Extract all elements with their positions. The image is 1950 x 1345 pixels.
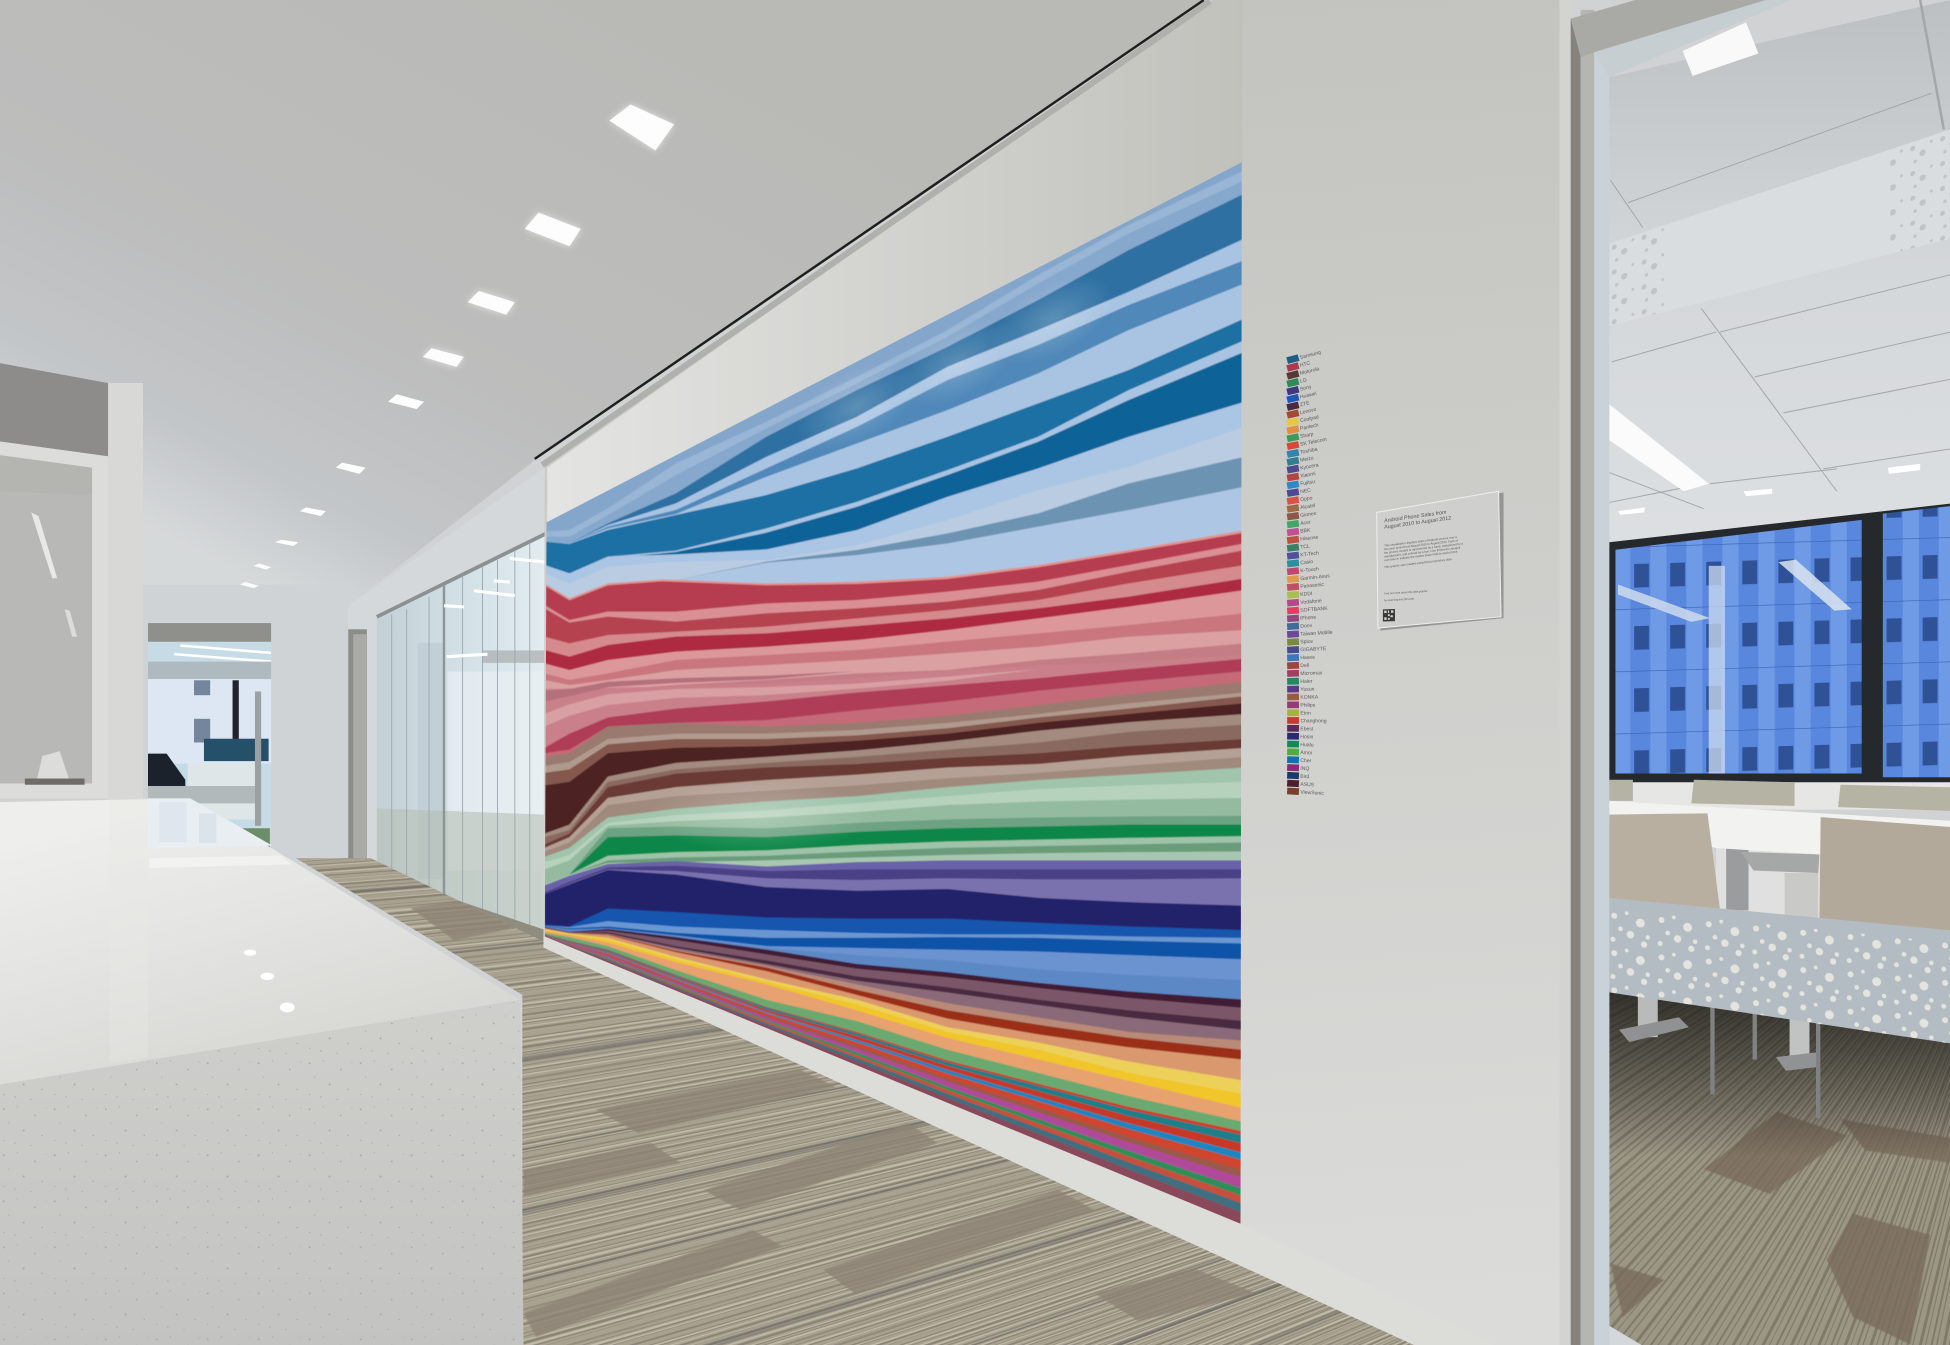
- thin multicoloured bands: smaller manufacturers: [545, 934, 1245, 1226]
- legend: manufacturer colour key: LG: [1299, 377, 1307, 385]
- legend: manufacturer colour key: Xiaomi: [1300, 471, 1316, 480]
- mural: stacked stream graph of Android phone sales: [535, 149, 1250, 1237]
- upper wall band above mural: [547, 0, 1242, 522]
- blue bands: Huawei: [545, 909, 1245, 1001]
- room ceiling: [1609, 0, 1950, 542]
- legend: manufacturer colour key: Toshiba: [1300, 447, 1318, 456]
- brown bands: Motorola: [545, 682, 1245, 859]
- legend: manufacturer colour key: Eton: [1300, 711, 1311, 717]
- legend: manufacturer colour key: HTC: [1299, 360, 1311, 369]
- orange, yellow and tan bands: Lenovo, Coolpad, Pantech: [545, 928, 1245, 1134]
- blue bands: Samsung: [545, 170, 1245, 603]
- purple bands: Sony: [545, 860, 1245, 932]
- legend: manufacturer colour key: Vodafone: [1300, 598, 1322, 606]
- QR code: [1383, 609, 1395, 621]
- table bases and chair legs: [1619, 992, 1818, 1118]
- ceiling lights: [240, 104, 674, 588]
- placard body text: the phones models is represented by a band, categorized by a: [1384, 541, 1463, 555]
- placard title: Android Phone Sales from: [1384, 510, 1447, 524]
- frosted glass band, upper: [1609, 129, 1950, 326]
- left built-in display niche: [0, 363, 108, 798]
- legend: manufacturer colour key: Dell: [1300, 663, 1309, 669]
- far corridor wall: [143, 585, 354, 864]
- legend: manufacturer colour key: Philips: [1300, 703, 1316, 709]
- red and pink bands, lower: [545, 655, 1245, 759]
- ceiling: [0, 0, 1204, 606]
- legend: manufacturer colour key: iPhone: [1300, 615, 1317, 622]
- wall placard: [1377, 491, 1504, 631]
- legend: manufacturer colour key: Coolpad: [1300, 414, 1320, 424]
- legend: manufacturer colour key: Hualu: [1300, 742, 1314, 748]
- legend: manufacturer colour key: Samsung: [1299, 350, 1322, 361]
- legend: manufacturer colour key: Fujitsu: [1300, 479, 1316, 487]
- corridor door: [348, 629, 367, 859]
- legend: manufacturer colour key: Acer: [1300, 519, 1311, 527]
- counter top: [0, 798, 520, 1084]
- legend: manufacturer colour key: INQ: [1300, 766, 1309, 772]
- legend: manufacturer colour key: KDDI: [1300, 591, 1313, 598]
- near chairs: [1609, 813, 1950, 933]
- legend: manufacturer colour key: Sharp: [1300, 431, 1314, 440]
- legend: manufacturer colour key: Amoi: [1300, 750, 1312, 756]
- placard plate: [1377, 491, 1504, 631]
- legend: manufacturer colour key: SOFTBANK: [1300, 606, 1328, 614]
- wall with mural: [543, 0, 1569, 1345]
- counter highlights: [244, 950, 295, 1012]
- far doorway with view into open office: [148, 623, 271, 861]
- placard body text: This visualization displays sales of Android phones over a: [1384, 535, 1457, 548]
- green bands: LG: [545, 768, 1245, 898]
- counter front face: [0, 1000, 524, 1345]
- legend: manufacturer colour key: Meizu: [1300, 455, 1314, 464]
- window wall: [1609, 504, 1950, 785]
- legend: manufacturer colour key: Sony: [1299, 384, 1313, 393]
- red bands: HTC: [545, 530, 1245, 693]
- legend: manufacturer colour key: ViewSonic: [1300, 790, 1324, 797]
- legend: manufacturer colour key: Garmin-Asus: [1300, 573, 1331, 582]
- under-table pillars and wall: [1716, 846, 1822, 920]
- legend: manufacturer colour key: K-Touch: [1300, 566, 1319, 574]
- legend: manufacturer colour key: Casio: [1300, 559, 1314, 566]
- legend: manufacturer colour key: NEC: [1300, 488, 1312, 495]
- legend: manufacturer colour key: Kyocera: [1300, 462, 1319, 472]
- placard body text: over time to indicate the market share held by each phone.: [1384, 549, 1458, 562]
- legend: manufacturer colour key: KT-Tech: [1300, 550, 1319, 559]
- placard QR caption: by scanning this QR code.: [1384, 596, 1415, 602]
- legend: manufacturer colour key: [1286, 348, 1333, 797]
- frosted glass band, lower: [1609, 898, 1950, 1043]
- legend: manufacturer colour key: Hasee: [1300, 655, 1315, 661]
- legend: manufacturer colour key: ZTE: [1300, 400, 1311, 408]
- conference table: [1609, 801, 1950, 871]
- maroon bands: ZTE: [545, 927, 1245, 1051]
- legend: manufacturer colour key: Huawei: [1299, 391, 1317, 401]
- legend: manufacturer colour key: Taiwan Mobile: [1300, 630, 1333, 638]
- legend: manufacturer colour key: Yusun: [1300, 687, 1315, 693]
- legend: manufacturer colour key: ASUS: [1300, 782, 1315, 788]
- legend: manufacturer colour key: Haier: [1300, 679, 1313, 685]
- legend: manufacturer colour key: Gionee: [1300, 511, 1317, 519]
- fluorescent strip: [1609, 404, 1709, 491]
- legend: manufacturer colour key: Spice: [1300, 639, 1313, 645]
- structural column: [108, 383, 143, 801]
- legend: manufacturer colour key: KONKA: [1300, 694, 1319, 701]
- legend: manufacturer colour key: Hisense: [1300, 534, 1319, 543]
- legend: manufacturer colour key: Changhong: [1300, 718, 1327, 724]
- legend: manufacturer colour key: TCL: [1300, 544, 1310, 551]
- legend: manufacturer colour key: Bird: [1300, 774, 1310, 780]
- carpet floor: corridor: [286, 846, 1430, 1345]
- legend: manufacturer colour key: Micromax: [1300, 670, 1323, 677]
- legend: manufacturer colour key: Doov: [1300, 623, 1313, 630]
- small ceiling lights: [1618, 464, 1920, 515]
- legend: manufacturer colour key: Cher: [1300, 758, 1312, 764]
- legend: manufacturer colour key: BBK: [1300, 527, 1311, 535]
- ceiling slot line: [535, 0, 1210, 465]
- legend: manufacturer colour key: GIGABYTE: [1300, 646, 1327, 653]
- baseboard: [543, 935, 1495, 1345]
- placard body text: two year period from August 2010 to August 2012. Each of: [1384, 538, 1458, 551]
- placard QR caption: Find out more about this data graphic: [1384, 589, 1428, 595]
- counter reflections: [109, 798, 292, 1063]
- legend: manufacturer colour key: Panasonic: [1300, 582, 1325, 590]
- legend: manufacturer colour key: Alcatel: [1300, 503, 1316, 511]
- placard body text: This graphic was created using D3.js proprietary data.: [1384, 557, 1452, 569]
- floor carpet in room: [1609, 989, 1950, 1345]
- placard body text: manufacturer, and colored by a hue. Line thickness changes: [1384, 545, 1461, 559]
- door frame: [1560, 0, 1791, 1345]
- legend: manufacturer colour key: Pantech: [1300, 422, 1319, 432]
- legend: manufacturer colour key: Hosin: [1300, 734, 1314, 740]
- legend: manufacturer colour key: Lenovo: [1300, 407, 1317, 416]
- legend: manufacturer colour key: Motorola: [1299, 366, 1320, 377]
- placard title: August 2010 to August 2012: [1384, 515, 1451, 531]
- legend: manufacturer colour key: Ebest: [1300, 726, 1314, 732]
- back wall strip and far chairs: [1609, 780, 1950, 811]
- room ceiling light: [1683, 22, 1758, 76]
- marble counter: [0, 798, 524, 1345]
- legend: manufacturer colour key: Oppo: [1300, 495, 1313, 503]
- side wall above glass partition: [348, 468, 545, 945]
- ceiling grid: [1609, 0, 1950, 509]
- meeting room seen through glass door: [1609, 0, 1950, 1345]
- legend: manufacturer colour key: SK Telecom: [1300, 437, 1327, 448]
- glass partition: [377, 534, 546, 945]
